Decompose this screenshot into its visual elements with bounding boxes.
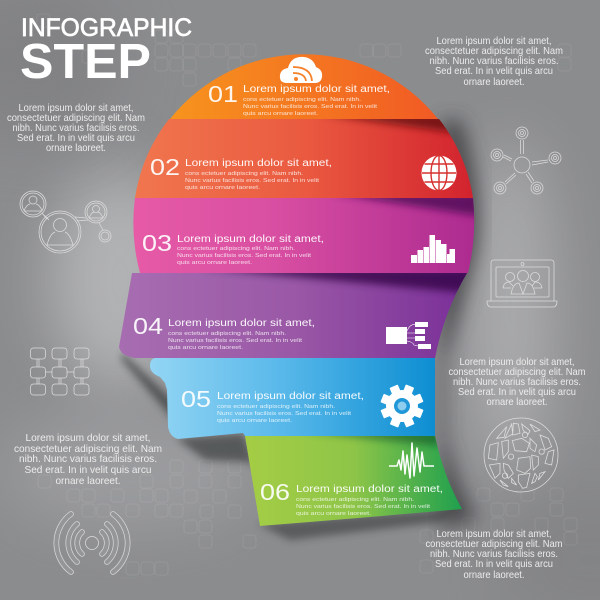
icon: bar chart [411, 235, 455, 263]
icon: hierarchy [386, 322, 431, 349]
text block: top left: Sed erat. In in velit quis arcu [17, 132, 135, 144]
text block: lower left: Sed erat. In in velit quis arcu [24, 464, 152, 476]
panel: step 5 blue [150, 358, 435, 439]
icon: flowchart [30, 348, 89, 395]
text: step 4: Nunc varius facilisis eros. Sed erat. In in velit [168, 338, 303, 344]
text: step 1: cons ectetuer adipiscing elit. Nam nibh. [243, 97, 362, 103]
text: step 5: cons ectetuer adipiscing elit. Nam nibh. [217, 404, 336, 410]
text: step 1: quis arcu ornare laoreet. [243, 111, 319, 117]
panel: step 1 orange [170, 54, 438, 119]
text block: middle right: ornare laoreet. [486, 396, 548, 408]
text: step 2 [185, 158, 332, 191]
text block: middle right: Lorem ipsum dolor sit amet, [460, 356, 574, 368]
title: STEP [20, 35, 151, 89]
text block: middle right [448, 356, 586, 408]
text: step 5: Nunc varius facilisis eros. Sed erat. In in velit [217, 411, 352, 417]
icon: people network [20, 191, 111, 253]
text block: bottom right: consectetuer adipiscing elit. Nam [426, 538, 563, 550]
text block: top left: nibh. Nunc varius facilisis eros. [12, 122, 140, 134]
text: step 3: cons ectetuer adipiscing elit. Nam nibh. [177, 246, 296, 252]
text block: top right: Lorem ipsum dolor sit amet, [436, 35, 552, 47]
text block: lower left [14, 432, 162, 487]
text block: bottom right: Sed erat. In in velit quis arcu [435, 558, 553, 570]
number 03: 03 [142, 230, 172, 256]
panel: step 3 magenta [133, 193, 480, 273]
text: step 5 [217, 391, 364, 424]
number 06: 06 [260, 479, 290, 505]
text: step 5: quis arcu ornare laoreet. [217, 418, 293, 424]
text block: top right: Sed erat. In in velit quis arcu [435, 65, 553, 77]
text: step 3 [177, 234, 324, 266]
panel: step 2 red [135, 114, 480, 198]
text block: lower left: Lorem ipsum dolor sit amet, [26, 432, 150, 444]
number 05: 05 [181, 386, 211, 412]
number 01: 01 [208, 81, 238, 107]
icon: cloud with signal [280, 57, 322, 83]
text: step 3: Nunc varius facilisis eros. Sed erat. In in velit [177, 253, 312, 259]
text block: bottom right: nibh. Nunc varius facilisis eros. [430, 548, 558, 560]
text: step 2: Nunc varius facilisis eros. Sed erat. In in velit [185, 178, 320, 184]
text: step 4 [168, 318, 315, 351]
text: step 1: Lorem ipsum dolor sit amet, [243, 84, 390, 95]
text: step 2: Lorem ipsum dolor sit amet, [185, 158, 332, 169]
icon: gear [374, 378, 430, 434]
text block: bottom right [426, 528, 563, 581]
head shadow [122, 120, 480, 540]
text block: bottom right: ornare laoreet. [464, 569, 524, 581]
text: step 4: quis arcu ornare laoreet. [168, 345, 244, 351]
text block: top left [7, 102, 145, 154]
panel: step 6 green [245, 431, 462, 526]
text block: top left: Lorem ipsum dolor sit amet, [18, 102, 134, 114]
text block: top right: ornare laoreet. [464, 76, 524, 88]
text: step 1 [243, 84, 390, 117]
panel: step 4 purple [119, 268, 480, 358]
text: step 2: quis arcu ornare laoreet. [185, 185, 261, 191]
icon: hub network [491, 127, 561, 194]
text block: middle right: Sed erat. In in velit quis arcu [458, 386, 576, 398]
text block: lower left: consectetuer adipiscing elit. Nam [14, 443, 162, 455]
text: step 1: Nunc varius facilisis eros. Sed erat. In in velit [243, 104, 378, 110]
text block: lower left: nibh. Nunc varius facilisis eros. [19, 453, 157, 465]
text block: bottom right: Lorem ipsum dolor sit amet, [436, 528, 552, 540]
icon: globe [422, 155, 456, 191]
icon: wire globe [484, 418, 558, 492]
number 02: 02 [150, 154, 180, 180]
text block: top right: consectetuer adipiscing elit. Nam [425, 45, 563, 57]
text block: top right [425, 35, 563, 88]
icon: radio waves [56, 514, 128, 572]
text: step 3: quis arcu ornare laoreet. [177, 260, 253, 266]
text: step 5: Lorem ipsum dolor sit amet, [217, 391, 364, 402]
text block: top right: nibh. Nunc varius facilisis eros. [430, 55, 558, 67]
icon: laptop with people [487, 260, 557, 307]
text: step 6: quis arcu ornare laoreet. [296, 511, 372, 517]
text block: middle right: consectetuer adipiscing elit. Nam [448, 366, 586, 378]
text: step 6: cons ectetuer adipiscing elit. Nam nibh. [296, 497, 415, 503]
text block: top left: consectetuer adipiscing elit. Nam [7, 112, 145, 124]
title: INFOGRAPHIC [21, 14, 192, 42]
text: step 4: Lorem ipsum dolor sit amet, [168, 318, 315, 329]
text: step 6: Nunc varius facilisis eros. Sed erat. In in velit [296, 504, 431, 510]
title [20, 14, 192, 89]
text: step 6: Lorem ipsum dolor sit amet, [296, 484, 443, 495]
text: step 4: cons ectetuer adipiscing elit. Nam nibh. [168, 331, 287, 337]
number 04: 04 [133, 313, 163, 339]
text block: middle right: nibh. Nunc varius facilisis eros. [453, 376, 581, 388]
text block: lower left: ornare laoreet. [56, 475, 120, 487]
text: step 3: Lorem ipsum dolor sit amet, [177, 234, 324, 245]
text: step 2: cons ectetuer adipiscing elit. Nam nibh. [185, 171, 304, 177]
icon: waveform [389, 443, 434, 478]
text: step 6 [296, 484, 443, 517]
text block: top left: ornare laoreet. [46, 142, 106, 154]
